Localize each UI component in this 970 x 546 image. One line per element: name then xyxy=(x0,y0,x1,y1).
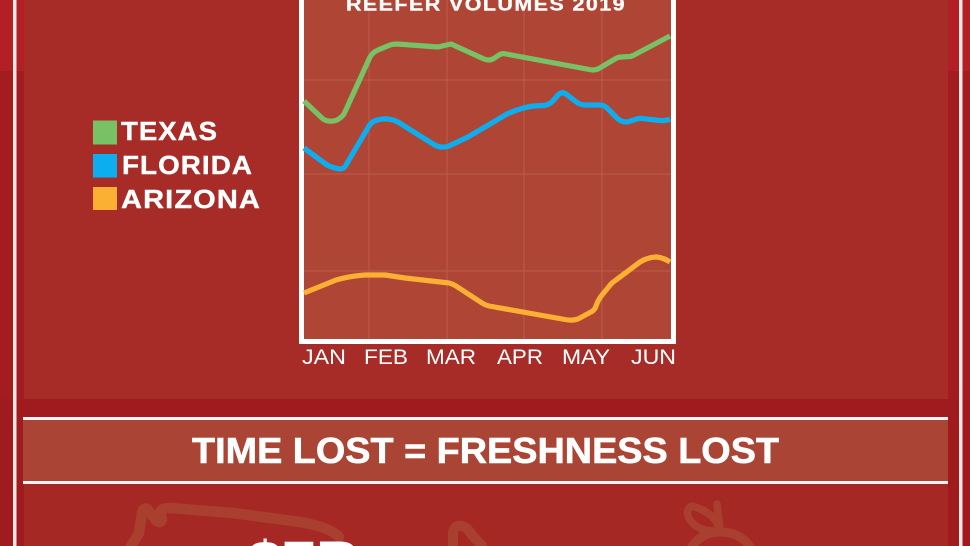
month labels: APR xyxy=(497,346,543,369)
panel: time lost xyxy=(23,417,948,546)
legend: Texas: TEXAS xyxy=(121,116,218,146)
icon: drop outline xyxy=(453,526,484,546)
month labels xyxy=(302,346,676,369)
series: Texas xyxy=(304,36,670,121)
month labels: JAN xyxy=(302,346,346,369)
heading band xyxy=(23,417,948,484)
legend: Arizona: ARIZONA xyxy=(121,184,261,214)
icon: pig outline xyxy=(130,508,339,546)
heading band: TIME LOST = FRESHNESS LOST xyxy=(192,430,779,471)
month labels: FEB xyxy=(364,346,408,369)
month labels: MAY xyxy=(562,346,610,369)
month labels: JUN xyxy=(631,346,676,369)
series: Arizona xyxy=(304,257,670,320)
legend xyxy=(93,116,261,214)
icon: apple outline xyxy=(687,504,752,546)
legend: Florida: FLORIDA xyxy=(122,150,253,180)
month labels: MAR xyxy=(426,346,476,369)
series: Florida xyxy=(304,93,670,169)
line chart xyxy=(302,0,676,369)
panel: reefer volumes xyxy=(24,0,948,399)
